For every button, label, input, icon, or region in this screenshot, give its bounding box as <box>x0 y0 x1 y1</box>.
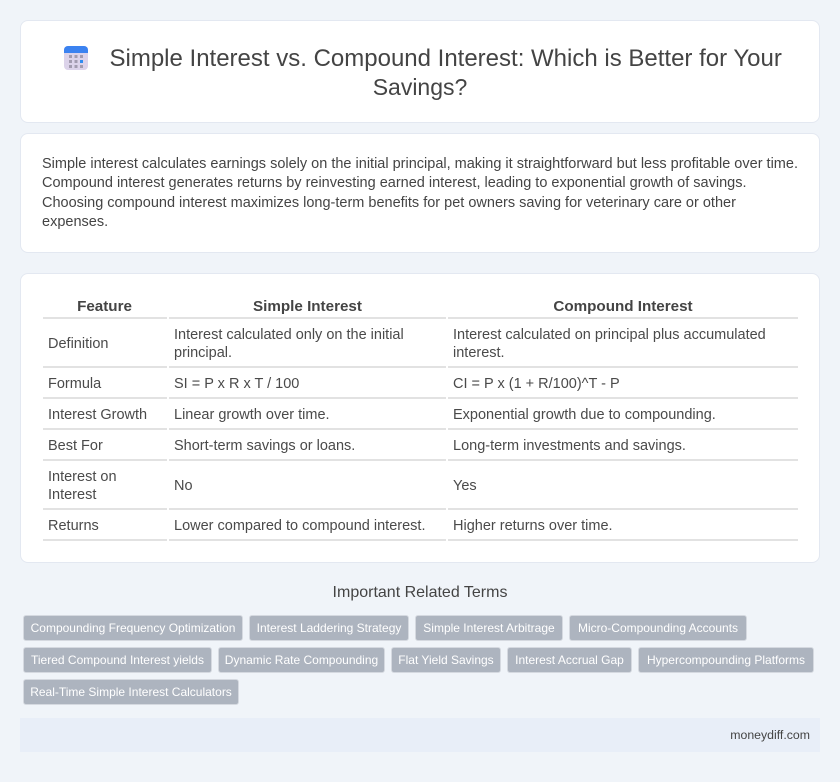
intro paragraph <box>42 156 798 230</box>
Definition simple: Interest calculated only on the initial <box>174 327 404 343</box>
tag <box>391 647 501 673</box>
intro paragraph: Compound interest generates returns by reinvesting earned interest, leading to exponential growth of savings. <box>42 175 746 191</box>
tag <box>23 615 243 641</box>
row: Returns: Returns <box>48 518 99 534</box>
Returns simple: Lower compared to compound interest. <box>174 518 425 534</box>
tag: Real-Time Simple Interest Calculators <box>30 685 232 699</box>
Definition compound <box>453 327 766 361</box>
tag: Interest Accrual Gap <box>515 653 624 667</box>
icon: calendar <box>64 46 88 70</box>
tag: Compounding Frequency Optimization <box>31 621 235 635</box>
tag <box>507 647 632 673</box>
tag: Interest Laddering Strategy <box>257 621 401 635</box>
tag <box>218 647 385 673</box>
footer bar <box>20 718 820 752</box>
table header: Simple Interest: Simple Interest <box>253 298 362 315</box>
tag <box>415 615 563 641</box>
row: Interest on Interest <box>48 469 117 503</box>
tag <box>23 679 239 705</box>
row: Interest on Interest: Interest <box>48 487 96 503</box>
Definition compound: interest. <box>453 345 505 361</box>
Returns compound: Higher returns over time. <box>453 518 613 534</box>
Best for compound: Long-term investments and savings. <box>453 438 686 454</box>
row: Interest on Interest: Interest on <box>48 469 117 485</box>
header panel <box>20 20 820 123</box>
title: Simple Interest vs. Compound Interest: Which is Better for Your <box>110 45 782 72</box>
title: Savings? <box>373 74 467 100</box>
intro text panel <box>20 133 820 253</box>
tag <box>249 615 409 641</box>
row: Interest Growth: Interest Growth <box>48 407 147 423</box>
tag <box>569 615 747 641</box>
table header: Compound Interest: Compound Interest <box>553 298 693 315</box>
tag <box>638 647 814 673</box>
intro paragraph: Choosing compound interest maximizes long-term benefits for pet owners saving for veterinary care or other <box>42 194 736 210</box>
Growth simple: Linear growth over time. <box>174 407 330 423</box>
related terms heading: Important Related Terms <box>333 584 507 601</box>
tag <box>23 647 212 673</box>
row: Best For: Best For <box>48 438 103 454</box>
footer source: moneydiff.com <box>730 728 810 742</box>
row: Definition: Definition <box>48 336 108 352</box>
Interest on interest simple: No <box>174 478 193 494</box>
tag: Tiered Compound Interest yields <box>31 653 204 667</box>
Definition compound: Interest calculated on principal plus accumulated <box>453 327 766 343</box>
Growth compound: Exponential growth due to compounding. <box>453 407 716 423</box>
intro paragraph: expenses. <box>42 214 108 230</box>
intro paragraph: Simple interest calculates earnings solely on the initial principal, making it straightforward but less profitable over time. <box>42 156 798 172</box>
Interest on interest compound: Yes <box>453 478 477 494</box>
table header: Feature: Feature <box>77 298 132 315</box>
Best for simple: Short-term savings or loans. <box>174 438 355 454</box>
Formula simple: SI = P x R x T / 100 <box>174 376 299 392</box>
comparison table panel <box>20 273 820 563</box>
Definition simple <box>174 327 404 361</box>
tag: Simple Interest Arbitrage <box>423 621 555 635</box>
Definition simple: principal. <box>174 345 232 361</box>
tag: Micro-Compounding Accounts <box>578 621 738 635</box>
row: Formula: Formula <box>48 376 101 392</box>
tag: Dynamic Rate Compounding <box>225 653 378 667</box>
tag: Flat Yield Savings <box>398 653 494 667</box>
tags: related terms <box>23 615 814 705</box>
tag: Hypercompounding Platforms <box>647 653 805 667</box>
Formula compound: CI = P x (1 + R/100)^T - P <box>453 376 620 392</box>
title <box>110 45 782 100</box>
